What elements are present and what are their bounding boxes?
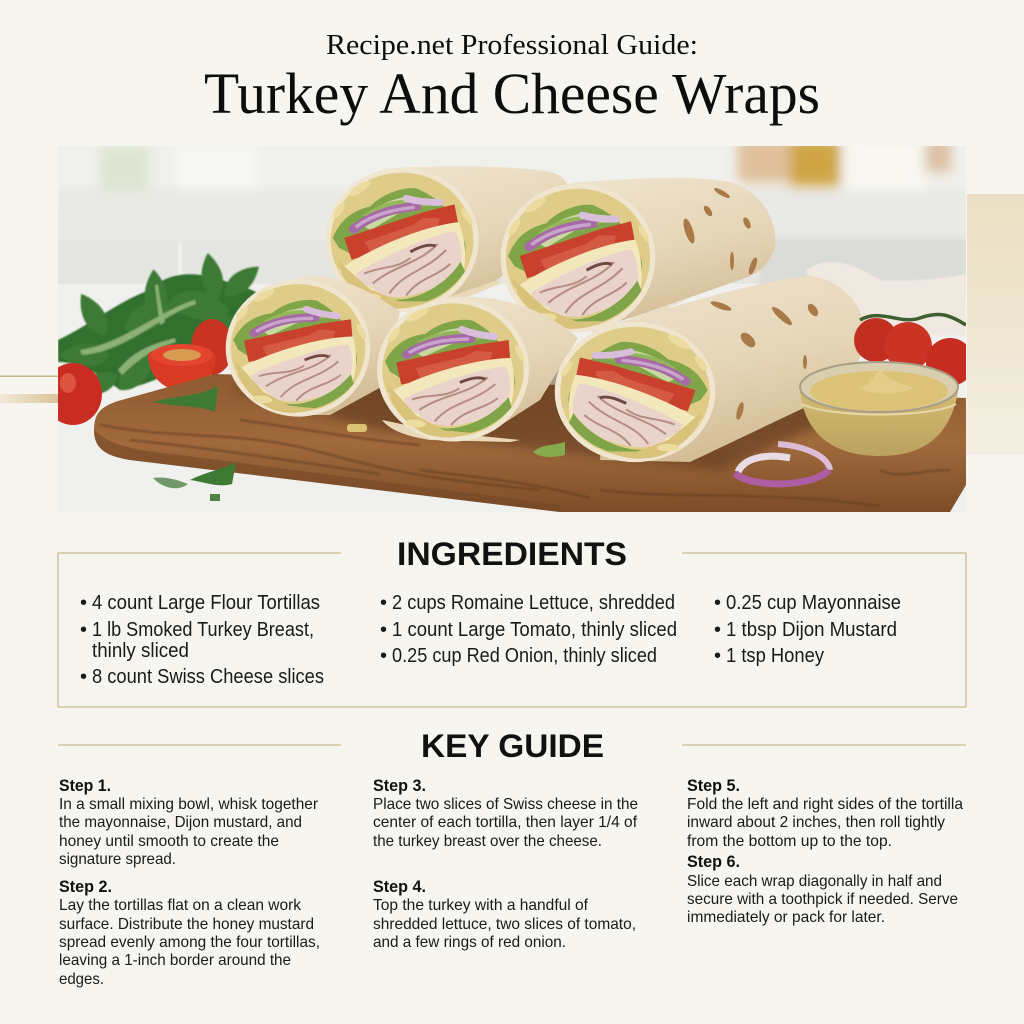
step 5	[687, 777, 963, 850]
step 4	[373, 878, 636, 951]
subtitle: Recipe.net Professional Guide:	[326, 29, 698, 61]
key guide rules	[58, 744, 966, 746]
wrap: bottom right	[555, 276, 865, 462]
step 2: spread evenly among the four tortillas,	[59, 934, 320, 951]
ingredients column 1: 8 count Swiss Cheese slices	[92, 666, 324, 688]
mustard dip bowl	[800, 362, 958, 456]
step 4: and a few rings of red onion.	[373, 934, 566, 951]
ingredients column 2: 1 count Large Tomato, thinly sliced	[392, 619, 677, 641]
section: ingredients	[58, 536, 966, 707]
step 2: leaving a 1-inch border around the	[59, 952, 291, 969]
step 2: Step 2.	[59, 878, 112, 896]
red onion ring	[735, 444, 830, 484]
step 1	[59, 777, 319, 868]
step 2	[59, 878, 320, 988]
ingredients column 1: thinly sliced	[92, 640, 189, 662]
wrap: bottom middle	[377, 296, 578, 442]
step 6	[687, 853, 958, 926]
ingredients column 2: •	[380, 619, 387, 641]
key guide heading: KEY GUIDE	[421, 728, 604, 764]
step 3: Step 3.	[373, 777, 426, 795]
herb bunch	[58, 251, 265, 403]
ingredients column 3: •	[714, 645, 721, 667]
step 3	[373, 777, 638, 850]
cutting board	[94, 360, 966, 512]
step 2: edges.	[59, 971, 104, 988]
step 2: Lay the tortillas flat on a clean work	[59, 897, 302, 914]
wrap: top right	[501, 178, 775, 333]
step 1: signature spread.	[59, 851, 176, 868]
step 6: secure with a toothpick if needed. Serve	[687, 891, 958, 908]
ingredients column 1: •	[80, 592, 87, 614]
ingredients column 3: •	[714, 592, 721, 614]
step 4: Top the turkey with a handful of	[373, 897, 589, 914]
step 1: In a small mixing bowl, whisk together	[59, 796, 319, 813]
ingredients column 1: •	[80, 619, 87, 641]
section: key guide	[58, 728, 966, 988]
step 2: surface. Distribute the honey mustard	[59, 916, 314, 933]
step 6: Slice each wrap diagonally in half and	[687, 873, 942, 890]
step 3: Place two slices of Swiss cheese in the	[373, 796, 638, 813]
title block	[204, 29, 820, 126]
ingredients column 3: 1 tsp Honey	[726, 645, 824, 667]
step 6: Step 6.	[687, 853, 740, 871]
decorative left accent lines	[0, 376, 58, 403]
ingredients column 2: •	[380, 645, 387, 667]
ingredients heading: INGREDIENTS	[397, 536, 627, 572]
step 1: the mayonnaise, Dijon mustard, and	[59, 814, 302, 831]
step 3: the turkey breast over the cheese.	[373, 833, 602, 850]
ingredients column 2: 0.25 cup Red Onion, thinly sliced	[392, 645, 657, 667]
cherry tomatoes left	[44, 319, 233, 425]
step 5: from the bottom up to the top.	[687, 833, 892, 850]
step 6: immediately or pack for later.	[687, 909, 885, 926]
step 1: honey until smooth to create the	[59, 833, 279, 850]
step 3: center of each tortilla, then layer 1/4 of	[373, 814, 638, 831]
towel	[805, 262, 966, 335]
step 5: Fold the left and right sides of the tortilla	[687, 796, 963, 813]
kitchen background	[58, 146, 966, 284]
herb sprigs	[153, 386, 565, 501]
step 5: Step 5.	[687, 777, 740, 795]
tomatoes on the vine right	[854, 314, 974, 386]
main title: Turkey And Cheese Wraps	[204, 61, 820, 126]
ingredients column 2	[380, 592, 677, 667]
wrap: bottom left	[226, 276, 400, 417]
ingredients column 2: 2 cups Romaine Lettuce, shredded	[392, 592, 675, 614]
step 4: Step 4.	[373, 878, 426, 896]
ingredients column 1: •	[80, 666, 87, 688]
ingredients column 3: 0.25 cup Mayonnaise	[726, 592, 901, 614]
step 4: shredded lettuce, two slices of tomato,	[373, 916, 636, 933]
ingredients frame	[58, 553, 966, 707]
ingredients column 2: •	[380, 592, 387, 614]
ingredients column 3	[714, 592, 901, 667]
ingredients column 1: 1 lb Smoked Turkey Breast,	[92, 619, 314, 641]
ingredients column 3: •	[714, 619, 721, 641]
wrap: top left	[325, 166, 568, 312]
hero photo illustration: wraps on a wooden board	[44, 140, 974, 512]
ingredients column 3: 1 tbsp Dijon Mustard	[726, 619, 897, 641]
step 5: inward about 2 inches, then roll tightly	[687, 814, 945, 831]
decorative right beige panel	[967, 194, 1024, 455]
ingredients column 1: 4 count Large Flour Tortillas	[92, 592, 320, 614]
step 1: Step 1.	[59, 777, 111, 795]
ingredients column 1	[80, 592, 324, 688]
